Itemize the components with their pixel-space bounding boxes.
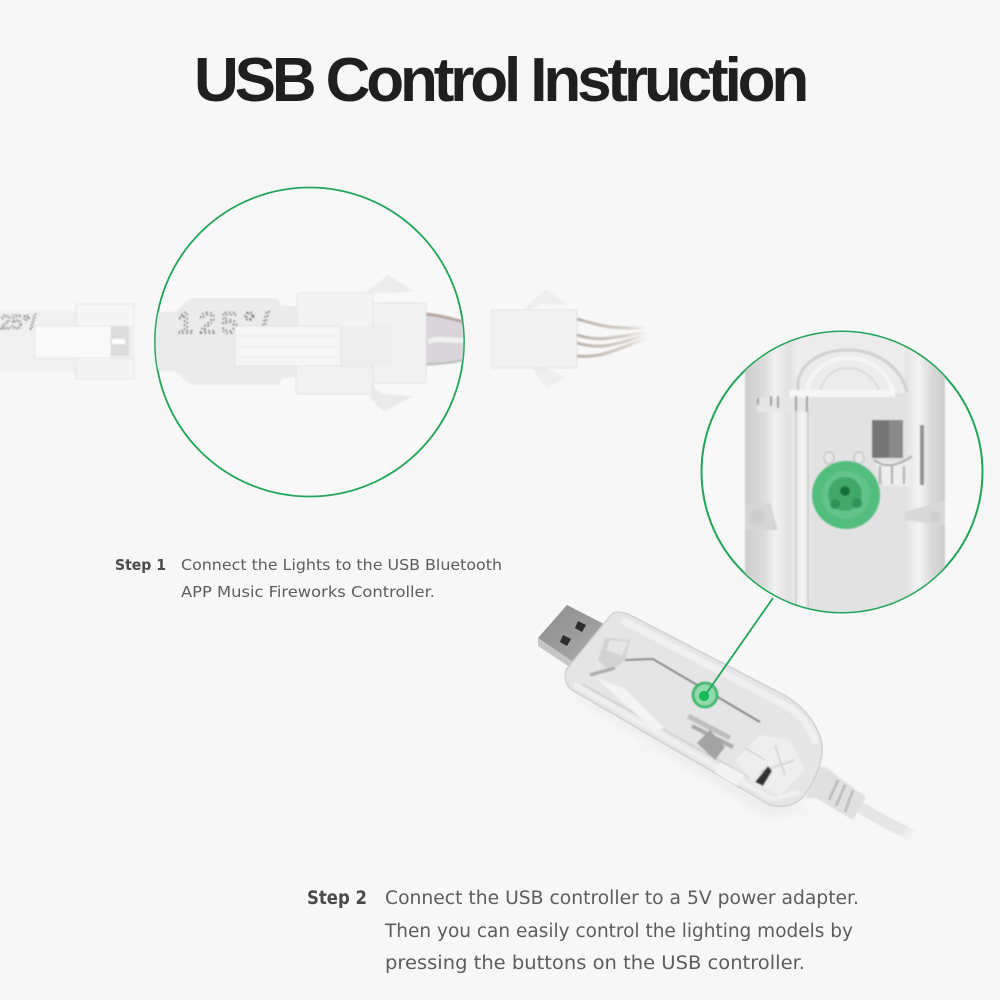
right connector housing with wires [492,289,648,389]
housing [373,303,426,383]
left connector plug: 25°/ [0,312,36,334]
strain relief [806,766,866,820]
magnified USB interior [745,330,945,620]
step 1 label: Step 1 [115,556,166,574]
small button highlight [693,683,717,707]
inner housing details [574,620,816,799]
strand and bulge [155,298,300,385]
green pointer line [706,598,773,694]
USB controller [538,605,927,842]
printed marking: 125°/ [177,307,270,340]
USB plug [538,605,604,662]
clear housing [565,612,822,806]
step 1 line 2: APP Music Fireworks Controller. [181,583,435,601]
magnified connector [155,275,464,412]
hooks [368,276,412,292]
magnified button circle [702,330,982,620]
step 2 line 3: pressing the buttons on the USB controller. [385,953,805,974]
step 2 line 1: Connect the USB controller to a 5V power adapter. [385,888,859,909]
cable [858,806,927,842]
step 2 line 2: Then you can easily control the lighting models by [384,921,853,942]
locking tab [235,326,341,366]
title: USB Control Instruction [194,46,806,115]
step 2 text [307,888,859,974]
coloured wires [426,314,464,366]
step 2 label: Step 2 [307,888,367,909]
step 1 text [115,556,502,601]
left connector plug [0,304,134,379]
green button [812,461,880,529]
step 1 line 1: Connect the Lights to the USB Bluetooth [181,556,502,574]
soft shadow [575,660,810,818]
magnified connector circle [155,188,464,496]
